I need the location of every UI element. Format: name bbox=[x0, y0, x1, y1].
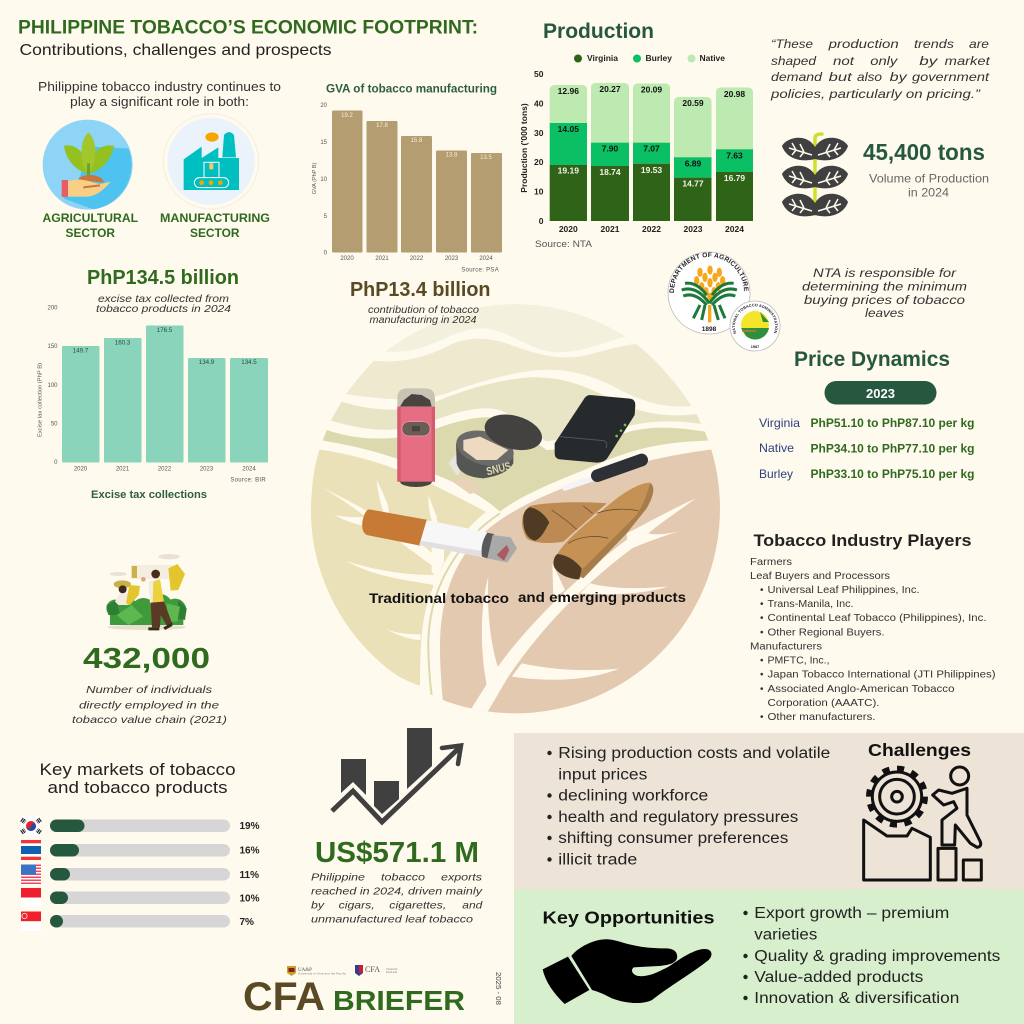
heading: key opportunities: Key Opportunities bbox=[542, 908, 715, 928]
bar chart: GVA of tobacco manufacturing: 15 bbox=[320, 140, 328, 146]
stat: 45,400 tons bbox=[863, 139, 989, 200]
icon: open hand bbox=[543, 939, 711, 1004]
heading: challenges: Challenges bbox=[868, 740, 971, 760]
bar list: key markets by country: 7% bbox=[240, 917, 254, 928]
bar chart: excise tax collections: 149.7 bbox=[73, 348, 89, 354]
stacked bar chart: production: 2024 bbox=[725, 224, 744, 234]
caption: traditional tobacco and emerging products bbox=[369, 590, 686, 606]
bar chart: GVA of tobacco manufacturing: 2023 bbox=[445, 256, 459, 262]
panel: price dynamics: PhP34.10 to PhP77.10 per kg bbox=[810, 444, 974, 456]
stat: exports: Philippine bbox=[311, 872, 365, 884]
legend: Virginia bbox=[587, 53, 618, 63]
stat: exports: cigars, bbox=[339, 900, 375, 912]
heading: key markets: and tobacco products bbox=[48, 778, 228, 797]
issue number: 2025 - 08 bbox=[494, 972, 501, 1005]
bar list: key markets by country: 16% bbox=[240, 846, 260, 856]
flag: South Korea bbox=[21, 816, 41, 836]
flag: Thailand bbox=[21, 840, 41, 860]
bar chart: excise tax collections: 160.3 bbox=[115, 340, 131, 346]
stacked bar chart: production: 20 bbox=[534, 157, 544, 167]
logo: CFA Briefer: CFA bbox=[243, 975, 325, 1019]
opportunities list: Value-added products bbox=[754, 969, 924, 986]
icon: manufacturing sector bbox=[163, 114, 259, 209]
stacked bar chart: production: Production ('000 tons) bbox=[519, 103, 529, 193]
heading: key markets: Key markets of tobacco bbox=[40, 760, 236, 779]
panel: tobacco industry players: • bbox=[760, 585, 764, 596]
bar chart: excise tax collections bbox=[38, 306, 268, 501]
icon: heated tobacco device bbox=[555, 395, 635, 463]
logo: Department of Agriculture bbox=[668, 252, 750, 334]
icon: snus tin: SNUS bbox=[485, 460, 513, 478]
panel: tobacco industry players: PMFTC, Inc., bbox=[768, 654, 830, 666]
bar chart: excise tax collections: 2020 bbox=[74, 466, 88, 472]
quote: shaped bbox=[771, 54, 816, 68]
NTA note: buying prices of tobacco bbox=[804, 295, 966, 307]
legend bbox=[574, 53, 725, 63]
bar chart: excise tax collections: 0 bbox=[54, 460, 58, 466]
stat: PhP134.5 billion bbox=[87, 266, 239, 315]
logos: UA&P and CFA: University of Asia and the Pacific bbox=[298, 972, 347, 976]
stacked bar chart: production: Source: NTA bbox=[535, 239, 592, 249]
year pill: 2023 bbox=[866, 386, 895, 401]
caption: traditional tobacco and emerging products: Traditional tobacco bbox=[369, 591, 509, 606]
logo: National Tobacco Administration bbox=[730, 300, 780, 352]
panel: tobacco industry players: Tobacco Industry Players bbox=[754, 531, 972, 550]
logo: CFA Briefer bbox=[243, 975, 465, 1019]
bar chart: excise tax collections: 50 bbox=[51, 422, 58, 428]
stacked bar chart: production: 20.27 bbox=[599, 84, 621, 94]
bar chart: excise tax collections: Excise tax collection (PhP B) bbox=[38, 363, 44, 437]
stat: PhP134.5 billion: tobacco products in 2024 bbox=[96, 303, 231, 315]
logo: National Tobacco Administration: 1987 bbox=[751, 345, 759, 349]
panel: price dynamics: Price Dynamics bbox=[794, 348, 950, 371]
challenges list bbox=[547, 745, 830, 868]
logo: Department of Agriculture: 1898 bbox=[702, 326, 717, 333]
quote: demand bbox=[771, 70, 822, 84]
quote bbox=[770, 37, 991, 101]
quote: trends bbox=[914, 37, 954, 51]
quote: not bbox=[833, 54, 855, 68]
icon: pod vape bbox=[397, 388, 435, 487]
bar list: key markets by country: 19% bbox=[240, 821, 260, 832]
bar chart: excise tax collections: Excise tax collections bbox=[91, 489, 207, 501]
bar chart: excise tax collections: 2021 bbox=[116, 466, 130, 472]
bar chart: excise tax collections: 150 bbox=[47, 344, 58, 350]
stat: exports: tobacco bbox=[381, 872, 425, 884]
stat: 432,000 employed: Number of individuals bbox=[86, 684, 213, 696]
panel: tobacco industry players: • bbox=[760, 613, 764, 624]
bar chart: GVA of tobacco manufacturing: 13.8 bbox=[446, 152, 458, 158]
bar chart: GVA of tobacco manufacturing: 5 bbox=[324, 214, 328, 220]
quote: by bbox=[919, 54, 939, 68]
intro text bbox=[38, 80, 281, 109]
bar chart: GVA of tobacco manufacturing: 2024 bbox=[479, 256, 493, 262]
stacked bar chart: production: 19.53 bbox=[641, 165, 662, 175]
quote: “These bbox=[771, 37, 813, 51]
stacked bar chart: production: 50 bbox=[534, 69, 544, 79]
flag: United States bbox=[21, 864, 41, 884]
panel: challenges bbox=[514, 733, 1024, 889]
panel: tobacco industry players: • bbox=[760, 712, 764, 723]
stat: PhP13.4 billion bbox=[350, 278, 490, 326]
stat: 432,000 employed: 432,000 bbox=[83, 643, 210, 675]
stacked bar chart: production: 20.59 bbox=[682, 98, 704, 108]
icon: cigars bbox=[522, 483, 653, 579]
bar chart: GVA of tobacco manufacturing: 13.5 bbox=[480, 155, 492, 161]
panel: tobacco industry players: Japan Tobacco International (JTI Philippines) bbox=[768, 668, 996, 680]
caption: traditional tobacco and emerging products: and emerging products bbox=[518, 590, 686, 605]
legend: Native bbox=[700, 53, 725, 63]
stat: exports bbox=[311, 837, 484, 926]
panel: price dynamics: Native bbox=[759, 441, 794, 455]
panel: tobacco industry players: Associated Anglo-American Tobacco bbox=[768, 683, 955, 695]
bar chart: excise tax collections: Source: BIR bbox=[230, 478, 266, 484]
stat: exports: US$571.1 M bbox=[315, 837, 479, 869]
stacked bar chart: production: 7.90 bbox=[602, 144, 619, 154]
opportunities list bbox=[743, 905, 1001, 1007]
title: PHILIPPINE TOBACCO’S ECONOMIC FOOTPRINT: bbox=[18, 16, 478, 38]
stacked bar chart: production: 2021 bbox=[601, 224, 620, 234]
challenges list: declining workforce bbox=[558, 788, 708, 804]
year pill bbox=[824, 381, 936, 404]
heading: production: Production bbox=[543, 20, 654, 43]
panel: tobacco industry players: Farmers bbox=[750, 556, 792, 568]
stacked bar chart: production: 16.79 bbox=[724, 173, 745, 183]
bar chart: GVA of tobacco manufacturing: 10 bbox=[320, 177, 328, 183]
bar chart: excise tax collections: 134.5 bbox=[241, 359, 257, 366]
stat: PhP134.5 billion: excise tax collected from bbox=[98, 293, 229, 305]
stacked bar chart: production: 12.96 bbox=[558, 86, 579, 96]
title bbox=[18, 16, 478, 59]
panel: tobacco industry players: Trans-Manila, Inc. bbox=[768, 598, 854, 610]
stat: exports: by bbox=[311, 900, 325, 912]
NTA note: determining the minimum bbox=[802, 282, 968, 294]
stat: PhP134.5 billion: PhP134.5 billion bbox=[87, 266, 239, 289]
sector labels: AGRICULTURAL bbox=[42, 213, 138, 225]
panel: tobacco industry players: • bbox=[760, 670, 764, 680]
panel: price dynamics: PhP51.10 to PhP87.10 per kg bbox=[810, 418, 974, 430]
bar chart: GVA of tobacco manufacturing bbox=[312, 82, 502, 274]
bar chart: GVA of tobacco manufacturing: GVA (PhP B) bbox=[312, 163, 318, 194]
panel: tobacco industry players: Continental Leaf Tobacco (Philippines), Inc. bbox=[768, 612, 986, 624]
panel: tobacco industry players: Other manufacturers. bbox=[768, 711, 876, 723]
icon: snus tin bbox=[448, 409, 546, 494]
stat: 45,400 tons: 45,400 tons bbox=[863, 139, 985, 165]
sector labels: SECTOR bbox=[66, 228, 116, 240]
bar list: key markets by country: 11% bbox=[240, 870, 259, 881]
stacked bar chart: production: 7.63 bbox=[726, 150, 743, 160]
stat: PhP13.4 billion: manufacturing in 2024 bbox=[370, 315, 477, 326]
bar chart: GVA of tobacco manufacturing: 2022 bbox=[410, 256, 424, 262]
stat: 432,000 employed: directly employed in the bbox=[79, 700, 219, 712]
stat: exports: unmanufactured leaf tobacco bbox=[311, 914, 473, 926]
bar chart: excise tax collections: 2022 bbox=[158, 466, 172, 472]
bar chart: excise tax collections: 2024 bbox=[242, 466, 256, 472]
icon: cigarette bbox=[362, 509, 517, 562]
stat: exports: cigarettes, bbox=[389, 900, 446, 912]
stacked bar chart: production: 2022 bbox=[642, 224, 661, 234]
logos: UA&P and CFA: UA&P bbox=[298, 968, 312, 973]
logo: National Tobacco Administration: NATIONAL TOBACCO ADMINISTRATION bbox=[732, 304, 778, 334]
flag: Singapore bbox=[21, 912, 41, 931]
stat: PhP13.4 billion: contribution of tobacco bbox=[368, 305, 479, 316]
opportunities list: Quality & grading improvements bbox=[754, 948, 1001, 965]
title: Contributions, challenges and prospects bbox=[20, 42, 331, 59]
bar chart: excise tax collections: 200 bbox=[47, 306, 58, 312]
stacked bar chart: production: 2020 bbox=[559, 224, 578, 234]
panel: tobacco industry players: • bbox=[760, 599, 764, 610]
panel: tobacco industry players: Other Regional Buyers. bbox=[768, 626, 884, 638]
stacked bar chart: production: 6.89 bbox=[685, 158, 702, 168]
panel: price dynamics bbox=[759, 348, 974, 481]
quote: production bbox=[827, 37, 899, 51]
bar chart: GVA of tobacco manufacturing: 0 bbox=[324, 250, 328, 256]
intro text: Philippine tobacco industry continues to bbox=[38, 80, 281, 94]
panel: tobacco industry players: Manufacturers bbox=[750, 640, 822, 652]
panel: price dynamics: PhP33.10 to PhP75.10 per kg bbox=[810, 469, 974, 481]
bar chart: GVA of tobacco manufacturing: 20 bbox=[320, 103, 328, 109]
challenges list: illicit trade bbox=[558, 852, 637, 868]
logos: UA&P and CFA: Food and bbox=[386, 970, 398, 974]
stat: 432,000 employed: tobacco value chain (2021) bbox=[72, 714, 227, 726]
stat: PhP13.4 billion: PhP13.4 billion bbox=[350, 278, 490, 301]
panel: price dynamics: Virginia bbox=[759, 416, 800, 430]
bar list: key markets by country bbox=[21, 816, 260, 931]
bar chart: GVA of tobacco manufacturing: 19.2 bbox=[341, 113, 353, 119]
stacked bar chart: production: 7.07 bbox=[643, 144, 660, 154]
bar chart: excise tax collections: 134.9 bbox=[199, 359, 215, 366]
NTA note: leaves bbox=[865, 308, 904, 320]
leaf and landscape background circle bbox=[311, 304, 733, 733]
bar chart: GVA of tobacco manufacturing: 2021 bbox=[375, 256, 389, 262]
logo: CFA Briefer: BRIEFER bbox=[333, 985, 465, 1016]
stacked bar chart: production: 10 bbox=[534, 186, 544, 196]
bar chart: excise tax collections: 176.5 bbox=[157, 327, 173, 334]
icon: heat stick bbox=[565, 460, 642, 488]
stacked bar chart: production: 2023 bbox=[684, 224, 703, 234]
panel: key opportunities bbox=[514, 889, 1024, 1024]
stacked bar chart: production bbox=[519, 53, 753, 249]
sector labels: MANUFACTURING bbox=[160, 213, 270, 225]
icon: rising export chart bbox=[332, 728, 461, 822]
stacked bar chart: production: 14.05 bbox=[558, 124, 579, 134]
stat: exports: and bbox=[462, 900, 484, 912]
bar chart: excise tax collections: 100 bbox=[47, 383, 58, 389]
icon: tobacco leaves bbox=[782, 134, 848, 216]
logo: Department of Agriculture: DEPARTMENT OF AGRICULTURE bbox=[669, 252, 749, 293]
logos: UA&P and CFA: CFA bbox=[365, 965, 380, 974]
quote: government bbox=[912, 70, 990, 84]
challenges list: health and regulatory pressures bbox=[558, 809, 799, 826]
panel: tobacco industry players: • bbox=[760, 628, 764, 638]
quote: policies, particularly on pricing.” bbox=[770, 87, 981, 101]
stacked bar chart: production: 19.19 bbox=[558, 166, 579, 176]
logos: UA&P and CFA bbox=[287, 965, 398, 976]
opportunities list: Export growth – premium bbox=[754, 905, 949, 922]
bar list: key markets by country: 10% bbox=[240, 894, 260, 904]
NTA note: NTA is responsible for bbox=[813, 268, 957, 280]
bar chart: GVA of tobacco manufacturing: Source: PSA bbox=[461, 268, 499, 274]
quote: market bbox=[945, 54, 991, 68]
challenges list: input prices bbox=[558, 766, 648, 784]
icon: agricultural sector bbox=[43, 120, 133, 210]
heading: key markets bbox=[40, 760, 236, 797]
quote: also bbox=[857, 70, 882, 84]
quote: by bbox=[890, 70, 908, 84]
panel: tobacco industry players: Leaf Buyers and Processors bbox=[750, 570, 890, 582]
legend: Burley bbox=[646, 53, 672, 63]
stat: 45,400 tons: in 2024 bbox=[908, 186, 949, 200]
logos: UA&P and CFA: Center for bbox=[386, 967, 398, 971]
panel: price dynamics: Burley bbox=[759, 467, 793, 481]
quote: but bbox=[829, 70, 853, 84]
flag: Indonesia bbox=[21, 888, 41, 907]
panel: tobacco industry players: • bbox=[760, 684, 764, 695]
bar chart: GVA of tobacco manufacturing: 2020 bbox=[340, 256, 354, 262]
bar chart: GVA of tobacco manufacturing: 15.8 bbox=[411, 138, 423, 144]
quote: are bbox=[969, 37, 989, 51]
stacked bar chart: production: 0 bbox=[539, 216, 544, 226]
bar chart: excise tax collections: 2023 bbox=[200, 466, 214, 472]
stat: 432,000 employed bbox=[72, 643, 227, 726]
challenges list: shifting consumer preferences bbox=[558, 830, 789, 847]
stacked bar chart: production: 20.98 bbox=[724, 89, 745, 99]
panel: tobacco industry players: Corporation (AAATC). bbox=[768, 697, 880, 709]
panel: tobacco industry players: Universal Leaf Philippines, Inc. bbox=[768, 584, 920, 596]
stat: exports: exports bbox=[441, 872, 483, 884]
stacked bar chart: production: 18.74 bbox=[599, 167, 621, 177]
sector labels bbox=[42, 213, 270, 240]
quote: only bbox=[870, 54, 899, 68]
challenges list: Rising production costs and volatile bbox=[558, 745, 830, 762]
panel: tobacco industry players bbox=[750, 531, 996, 723]
icon: tobacco farmers illustration bbox=[106, 554, 187, 630]
stat: 45,400 tons: Volume of Production bbox=[869, 172, 989, 186]
sector labels: SECTOR bbox=[190, 228, 240, 240]
stacked bar chart: production: 14.77 bbox=[682, 178, 704, 188]
central illustration: leaf circle with tobacco products bbox=[311, 304, 733, 733]
stat: exports: reached in 2024, driven mainly bbox=[311, 886, 483, 898]
bar chart: GVA of tobacco manufacturing: GVA of tobacco manufacturing bbox=[326, 82, 497, 96]
icon: person climbing with gear bbox=[864, 767, 981, 880]
opportunities list: varieties bbox=[754, 926, 818, 944]
bar chart: GVA of tobacco manufacturing: 17.8 bbox=[376, 123, 388, 129]
opportunities list: Innovation & diversification bbox=[754, 990, 959, 1007]
stacked bar chart: production: 20.09 bbox=[641, 84, 662, 94]
stacked bar chart: production: 30 bbox=[534, 128, 544, 138]
NTA note bbox=[802, 268, 968, 320]
stacked bar chart: production: 40 bbox=[534, 98, 544, 108]
panel: tobacco industry players: • bbox=[760, 656, 764, 666]
intro text: play a significant role in both: bbox=[70, 95, 249, 109]
